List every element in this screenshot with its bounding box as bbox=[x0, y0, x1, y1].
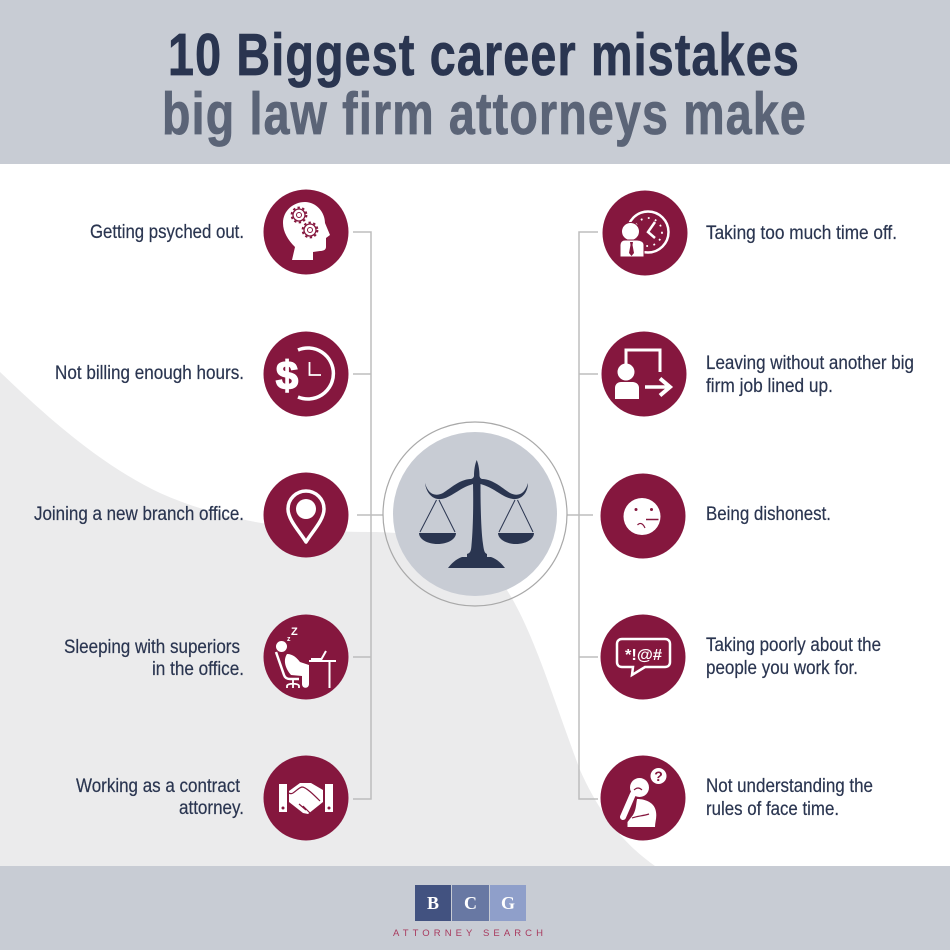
item: Being dishonest bbox=[600, 474, 831, 558]
icon: handshake bbox=[279, 783, 333, 814]
icon: thinking person with question mark bbox=[623, 768, 666, 827]
label: Not billing enough hours. bbox=[55, 363, 244, 384]
label line 1: Sleeping with superiors bbox=[64, 637, 240, 658]
icon: dollar and clock: $ bbox=[276, 354, 298, 398]
item: Joining a new branch office bbox=[34, 472, 348, 558]
label line 2: rules of face time. bbox=[706, 799, 839, 820]
label: Taking too much time off. bbox=[706, 223, 897, 244]
label line 2: in the office. bbox=[152, 659, 244, 680]
icon: speech bubble with symbols: *!@# bbox=[625, 647, 662, 664]
icon: person asleep at desk bbox=[276, 626, 336, 688]
icon: thinking person with question mark: ? bbox=[654, 768, 663, 784]
header band bbox=[0, 0, 950, 164]
logo: BCG Attorney Search: C bbox=[464, 893, 477, 913]
label line 2: people you work for. bbox=[706, 658, 858, 679]
item: Not understanding the rules of face time bbox=[600, 756, 873, 840]
icon: uneasy face bbox=[624, 498, 660, 535]
label: Getting psyched out. bbox=[90, 222, 244, 243]
icon: person asleep at desk: Z bbox=[291, 626, 298, 638]
icon: person asleep at desk: z bbox=[287, 636, 291, 643]
item: Working as a contract attorney bbox=[76, 756, 348, 840]
icon: person leaving door bbox=[615, 350, 670, 399]
logo: BCG Attorney Search: B bbox=[427, 893, 439, 913]
footer band bbox=[0, 866, 950, 950]
logo: BCG Attorney Search: ATTORNEY SEARCH bbox=[393, 928, 543, 939]
item: Not billing enough hours bbox=[55, 332, 348, 416]
icon: scales of justice bbox=[419, 460, 534, 568]
item: Taking poorly about the people you work for bbox=[600, 614, 881, 700]
item: Taking too much time off bbox=[602, 190, 897, 276]
label line 2: attorney. bbox=[179, 798, 244, 819]
label line 1: Leaving without another big bbox=[706, 353, 914, 374]
icon: dollar and clock bbox=[276, 348, 333, 399]
label line 1: Working as a contract bbox=[76, 776, 241, 797]
icon: speech bubble with symbols bbox=[617, 639, 670, 675]
logo: BCG Attorney Search: G bbox=[501, 893, 515, 913]
background swoosh bbox=[0, 372, 655, 866]
label: Joining a new branch office. bbox=[34, 504, 244, 525]
item: Getting psyched out bbox=[90, 190, 348, 274]
label line 2: firm job lined up. bbox=[706, 376, 833, 397]
icon: clock and businessman bbox=[620, 212, 668, 257]
central scales emblem bbox=[383, 422, 567, 606]
item: Leaving without another big firm job lined up bbox=[602, 332, 914, 416]
icon: map pin bbox=[288, 491, 324, 542]
item: Sleeping with superiors in the office bbox=[64, 614, 348, 700]
connector lines bbox=[353, 232, 598, 799]
label line 1: Not understanding the bbox=[706, 776, 873, 797]
title line 1: 10 Biggest career mistakes bbox=[168, 22, 800, 88]
icon: head with gears bbox=[283, 202, 330, 260]
label line 1: Taking poorly about the bbox=[706, 635, 881, 656]
logo: BCG Attorney Search bbox=[393, 885, 543, 939]
label: Being dishonest. bbox=[706, 504, 831, 525]
